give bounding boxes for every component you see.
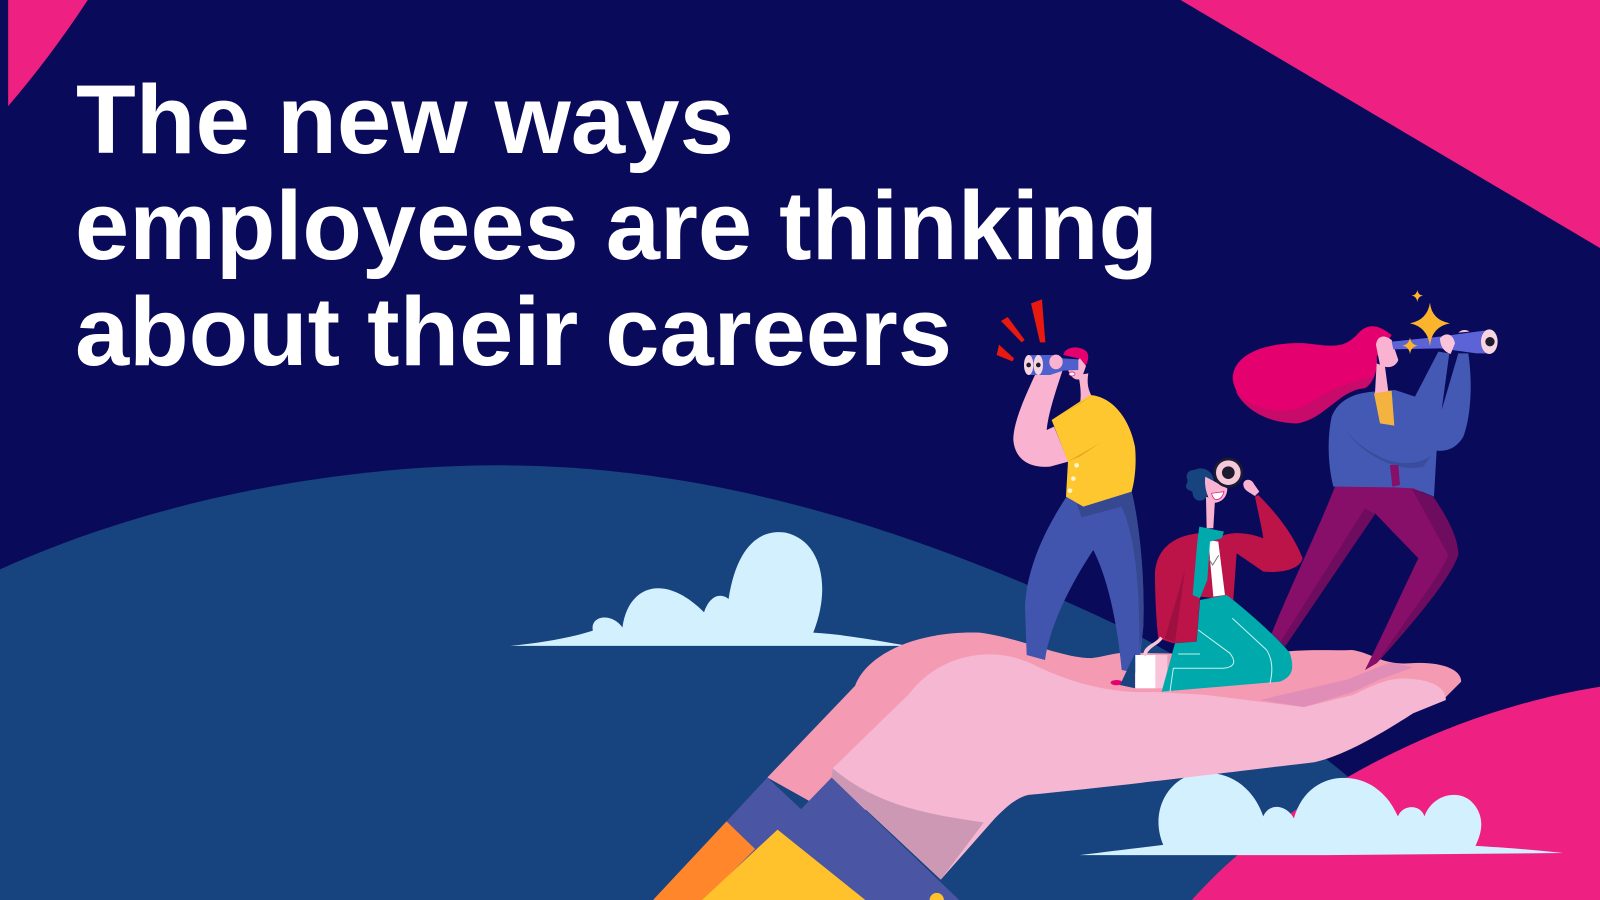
raised hand	[1243, 480, 1259, 496]
jacket fold	[1165, 570, 1185, 643]
lens right	[1034, 355, 1043, 375]
hair	[1063, 347, 1088, 367]
face	[1205, 477, 1227, 503]
title line 2: employees are thinking	[75, 171, 1158, 280]
figure: seated woman with magnifier	[1111, 458, 1303, 692]
wrist shade	[832, 768, 984, 880]
figure: man with binoculars	[997, 299, 1144, 673]
face	[1067, 358, 1086, 380]
figure: woman with telescope	[1233, 290, 1498, 670]
hair	[1233, 326, 1392, 423]
white sock	[1135, 655, 1156, 688]
red exclamation marks	[997, 299, 1045, 361]
palm	[832, 654, 1446, 880]
trousers	[1025, 492, 1144, 673]
hand front layer	[653, 654, 1446, 900]
shirt	[1208, 540, 1225, 597]
arm	[1013, 370, 1068, 467]
neck	[1375, 363, 1388, 393]
title line 3: about their careers	[75, 277, 952, 386]
large sparkle	[1410, 303, 1450, 346]
cloud right	[1080, 773, 1563, 855]
sweater	[1329, 352, 1471, 497]
dark trouser end	[1120, 653, 1135, 688]
cuff button	[930, 893, 944, 900]
magnifier lens	[1213, 458, 1243, 488]
leg	[1155, 655, 1167, 688]
mouth	[1212, 492, 1224, 499]
scarf	[1193, 527, 1224, 598]
palm crease	[1260, 662, 1413, 707]
telescope lens	[1481, 329, 1498, 354]
necklace	[1207, 555, 1219, 565]
trouser shade	[1281, 488, 1458, 663]
pink corner top left	[8, 0, 88, 106]
buttons	[1068, 463, 1079, 493]
hands	[1440, 330, 1469, 354]
binocular hand	[1049, 355, 1063, 369]
sleeve cuff	[653, 778, 959, 900]
waist tuck	[1390, 465, 1400, 487]
cloud left	[510, 532, 908, 646]
binoculars	[1028, 355, 1078, 375]
sweater shade	[1346, 429, 1432, 468]
telescope	[1392, 330, 1492, 353]
small sparkle top	[1412, 290, 1423, 302]
red shoe	[1111, 680, 1123, 685]
lens left	[1024, 355, 1033, 375]
pink hill bottom right	[1192, 687, 1600, 900]
arm resting	[1143, 637, 1163, 657]
dress	[1162, 595, 1292, 692]
neck	[1206, 497, 1215, 528]
pink corner top right	[1181, 0, 1600, 248]
dress lines	[1170, 618, 1272, 692]
trousers	[1272, 487, 1458, 670]
hair	[1186, 468, 1214, 501]
face	[1376, 336, 1398, 367]
neck	[1078, 373, 1092, 403]
title line 1: The new ways	[76, 65, 734, 174]
trouser shade	[1077, 492, 1144, 650]
hand back layer	[767, 633, 1461, 816]
hair shade	[1235, 377, 1373, 423]
shirt	[1052, 395, 1136, 507]
shirt fold	[1060, 396, 1101, 462]
small sparkle bottom	[1402, 337, 1418, 354]
collar	[1374, 391, 1394, 426]
jacket	[1155, 495, 1303, 643]
yellow shirt cuff	[702, 830, 865, 900]
mouth	[1069, 372, 1075, 376]
blue hill	[0, 465, 1349, 900]
orange shirt cuff	[653, 821, 755, 900]
